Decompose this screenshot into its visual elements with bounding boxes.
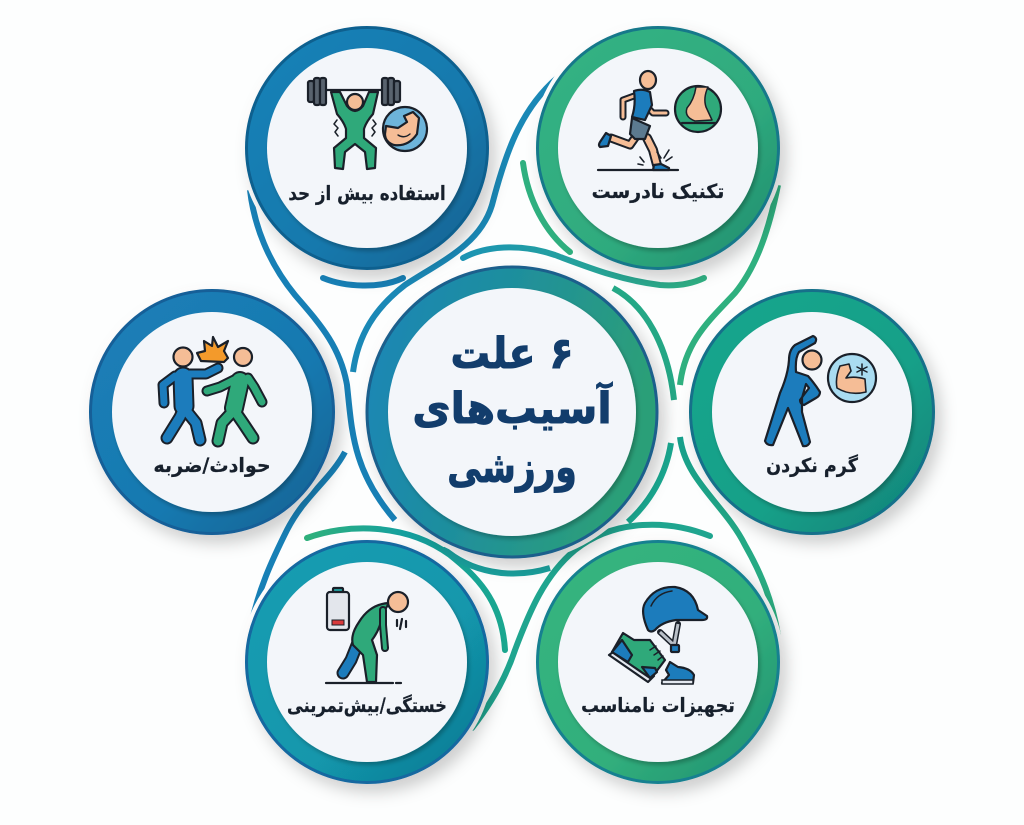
node: no warm-up (right) bbox=[685, 285, 939, 539]
node: unsuitable equipment (bottom-right) bbox=[532, 536, 784, 788]
shoe toe piece bbox=[662, 662, 694, 684]
helmet bbox=[643, 587, 707, 652]
ribbon: lower-left blue bbox=[250, 452, 345, 630]
ribbon: teal to green right lower bbox=[680, 437, 778, 635]
node: accidents / impact (left) bbox=[85, 285, 339, 539]
icon: runner with foot bbox=[598, 71, 721, 170]
label: خستگی/بیش‌تمرینی bbox=[287, 694, 447, 717]
ribbon: teal centre-right lower bbox=[628, 443, 671, 522]
title bbox=[412, 328, 613, 493]
ribbon: bottom-left arc bbox=[307, 528, 505, 650]
ribbon: green right upper bbox=[680, 185, 778, 385]
ribbon: bottom-right arc bbox=[472, 525, 710, 728]
node: fatigue / overtraining (bottom-left) bbox=[241, 536, 493, 788]
ribbon: arc under centre bbox=[443, 548, 550, 574]
icon: two people colliding bbox=[163, 337, 262, 441]
ribbon: arc below top-left circle bbox=[323, 278, 403, 286]
title: ۶ علت bbox=[451, 328, 573, 378]
ribbon: blue centre-left arc bbox=[353, 78, 557, 372]
ribbon: green arc below top-right circle bbox=[523, 163, 570, 252]
label: گرم نکردن bbox=[766, 454, 858, 477]
ribbon: left blue S-curve bbox=[250, 190, 395, 520]
person: green bbox=[207, 348, 262, 441]
ring bbox=[361, 261, 663, 563]
ring bbox=[241, 22, 493, 274]
icon: helmet and broken shoe bbox=[609, 587, 707, 684]
label: تکنیک نادرست bbox=[592, 180, 724, 203]
title: ورزشی bbox=[447, 443, 577, 493]
label: استفاده بیش از حد bbox=[288, 183, 446, 205]
shoe bbox=[609, 633, 665, 682]
label: حوادث/ضربه bbox=[153, 454, 271, 477]
ribbon: green centre-right arc bbox=[613, 288, 674, 400]
battery bbox=[327, 588, 349, 630]
person: blue bbox=[163, 348, 218, 440]
ring bbox=[685, 285, 939, 539]
icon: tired person with low battery bbox=[326, 588, 408, 683]
ring bbox=[532, 22, 784, 274]
ring bbox=[241, 536, 493, 788]
ribbon: arc above centre bbox=[463, 247, 704, 285]
ring bbox=[85, 285, 339, 539]
title: آسیب‌های bbox=[412, 381, 613, 433]
icon: stretching figure with muscle bbox=[765, 336, 876, 446]
node: incorrect technique (top-right) bbox=[532, 22, 784, 274]
ring bbox=[532, 536, 784, 788]
node: overuse (top-left) bbox=[241, 22, 493, 274]
label: تجهیزات نامناسب bbox=[581, 695, 735, 717]
centre circle bbox=[361, 261, 663, 563]
icon: weightlifter with muscle bbox=[308, 78, 427, 169]
flowing connector ribbons bbox=[250, 78, 778, 728]
